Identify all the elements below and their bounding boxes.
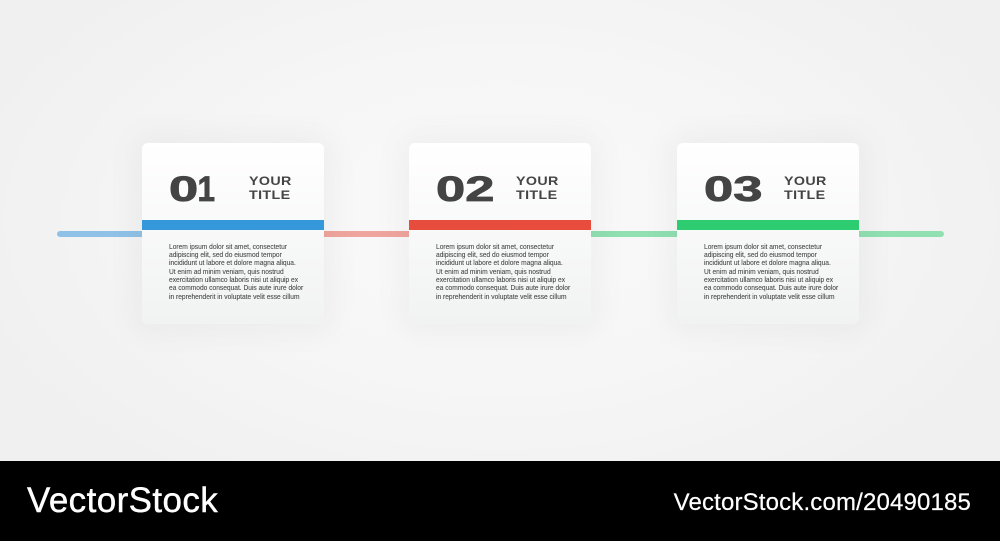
body text: Ut enim ad minim veniam, quis nostrud — [704, 268, 818, 276]
panel: step 03 — [676, 143, 858, 324]
body text: Lorem ipsum dolor sit amet, consectetur — [169, 243, 287, 251]
body text: Ut enim ad minim veniam, quis nostrud — [169, 268, 284, 276]
heading — [784, 176, 826, 202]
body text: adipiscing elit, sed do eiusmod tempor — [436, 251, 549, 259]
number 02: 02 — [436, 170, 494, 209]
body text: adipiscing elit, sed do eiusmod tempor — [169, 251, 282, 259]
body text: incididunt ut labore et dolore magna aliqua. — [436, 259, 563, 267]
panel: step 01 — [142, 143, 324, 324]
heading: YOUR — [516, 176, 559, 188]
body text — [704, 243, 838, 301]
timeline — [57, 231, 944, 237]
heading: TITLE — [249, 190, 290, 202]
footer band — [0, 461, 1000, 541]
line segment: red — [324, 231, 410, 237]
body text: Lorem ipsum dolor sit amet, consectetur — [436, 243, 554, 251]
heading: TITLE — [516, 190, 557, 202]
line segment: green end — [858, 231, 944, 237]
footer logo text: VectorStock — [27, 481, 218, 520]
body text — [169, 243, 304, 301]
body text: in reprehenderit in voluptate velit esse cillum — [169, 293, 300, 301]
body text: ea commodo consequat. Duis aute irure dolor — [169, 284, 303, 292]
heading: TITLE — [784, 190, 825, 202]
colour bar: blue — [142, 220, 324, 230]
colour bar: green — [676, 220, 858, 230]
body text: exercitation ullamco laboris nisi ut aliquip ex — [436, 276, 565, 284]
number 01: 1 — [198, 170, 216, 209]
heading — [516, 176, 559, 202]
body text: Ut enim ad minim veniam, quis nostrud — [436, 268, 551, 276]
line segment: blue — [57, 231, 143, 237]
heading: YOUR — [249, 176, 292, 188]
body text: adipiscing elit, sed do eiusmod tempor — [704, 251, 816, 259]
colour bar: red — [409, 220, 591, 230]
body text — [436, 243, 570, 301]
body text: Lorem ipsum dolor sit amet, consectetur — [704, 243, 821, 251]
panel: step 02 — [409, 143, 591, 324]
number 01 — [169, 170, 216, 209]
heading: YOUR — [784, 176, 826, 188]
body text: exercitation ullamco laboris nisi ut aliquip ex — [704, 276, 833, 284]
footer image id: VectorStock.com/20490185 — [674, 489, 971, 516]
body text: in reprehenderit in voluptate velit esse cillum — [436, 293, 567, 301]
body text: in reprehenderit in voluptate velit esse cillum — [704, 293, 834, 301]
number 03: 03 — [704, 170, 762, 209]
body text: incididunt ut labore et dolore magna aliqua. — [169, 259, 296, 267]
body text: ea commodo consequat. Duis aute irure dolor — [704, 284, 838, 292]
number 01: 0 — [169, 170, 198, 209]
body text: ea commodo consequat. Duis aute irure dolor — [436, 284, 570, 292]
body text: incididunt ut labore et dolore magna aliqua. — [704, 259, 830, 267]
body text: exercitation ullamco laboris nisi ut aliquip ex — [169, 276, 298, 284]
heading — [249, 176, 292, 202]
line segment: green — [591, 231, 677, 237]
